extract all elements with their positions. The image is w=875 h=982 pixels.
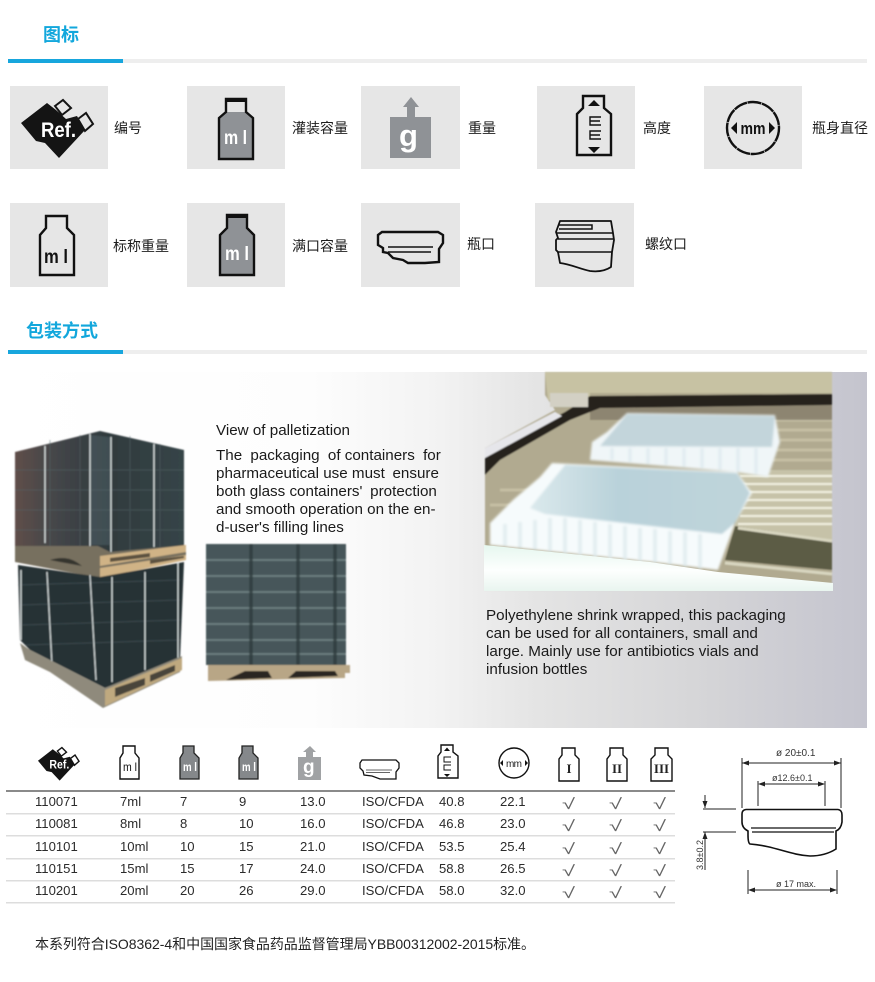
table row 110071: √ [653, 796, 667, 813]
table row 110101: 21.0 [300, 839, 325, 854]
table row 110071: 7 [180, 794, 187, 809]
table row 110081 [35, 816, 667, 835]
heading: 包装方式 [8, 320, 867, 354]
table row 110081: √ [562, 818, 576, 835]
table row 110201: 20ml [120, 883, 148, 898]
text: shrink wrap description: infusion bottles [486, 661, 588, 678]
table row 110081: 10 [239, 816, 254, 831]
table row 110151: √ [609, 863, 623, 880]
icon: diameter: mm [506, 759, 522, 770]
table row 110071: √ [609, 796, 623, 813]
table row 110101: 15 [239, 839, 254, 854]
table row 110071: 40.8 [439, 794, 464, 809]
table row 110201: 29.0 [300, 883, 325, 898]
label: 标称重量: 标称重量 [113, 238, 169, 254]
text: shrink wrap description: large. Mainly use for antibiotics vials and [486, 643, 759, 660]
photo: double stacked pallet [15, 431, 186, 708]
icon tile: 瓶身直径: mm [740, 119, 766, 138]
icon tile: 灌装容量: m l [224, 128, 247, 149]
text: palletization description [216, 447, 441, 536]
icon: weight: g [303, 757, 315, 778]
heading: 包装方式: 包装方式 [26, 320, 98, 341]
icon: filling: m l [183, 760, 197, 774]
table row 110081: 23.0 [500, 816, 525, 831]
table row 110101: 10 [180, 839, 195, 854]
table row 110151: 26.5 [500, 861, 525, 876]
table row 110071 [35, 794, 667, 813]
icon: brimful: m l [242, 760, 256, 774]
icon: finish [360, 760, 399, 779]
text: palletization description: and smooth operation on the en- [216, 501, 436, 518]
icon tile: 瓶口 [361, 203, 460, 287]
icon: filling [180, 746, 199, 779]
table row 110071: 7ml [120, 794, 141, 809]
table row 110081: 16.0 [300, 816, 325, 831]
table row 110201: √ [609, 885, 623, 902]
table row 110151: ISO/CFDA [362, 861, 424, 876]
diagram: bottle finish dimensions: ø 17 max. [776, 879, 816, 889]
table row 110201: 26 [239, 883, 254, 898]
label: 灌装容量: 灌装容量 [292, 120, 348, 136]
label: 重量: 重量 [468, 120, 496, 136]
label: 螺纹口: 螺纹口 [645, 236, 687, 252]
table row 110201: 20 [180, 883, 195, 898]
table row 110201 [35, 883, 667, 902]
icon tile: 重量: g [399, 118, 418, 153]
diagram: bottle finish dimensions: ø 20±0.1 [776, 748, 816, 759]
table row 110101 [35, 839, 667, 858]
diagram: bottle finish dimensions: ø12.6±0.1 [772, 773, 812, 783]
label: 瓶身直径: 瓶身直径 [812, 120, 868, 136]
table row 110201: 58.0 [439, 883, 464, 898]
table row 110101: 53.5 [439, 839, 464, 854]
table row 110101: ISO/CFDA [362, 839, 424, 854]
table row 110101: √ [609, 841, 623, 858]
icon: nominal [120, 746, 139, 779]
table row 110151: 15ml [120, 861, 148, 876]
table row 110081: 8 [180, 816, 187, 831]
diagram: bottle finish dimensions: 3.8±0.2 [695, 840, 705, 870]
text: palletization description: The packaging of containers for [216, 447, 441, 464]
diagram: bottle finish dimensions [695, 748, 842, 894]
table row 110081: √ [653, 818, 667, 835]
heading: 图标: 图标 [43, 25, 79, 45]
table row 110201: √ [653, 885, 667, 902]
label: 满口容量: 满口容量 [292, 238, 348, 254]
table row 110101: √ [562, 841, 576, 858]
photo: shrink wrapped packs on conveyor [484, 372, 833, 591]
table row 110151: 110151 [35, 861, 78, 876]
table row 110081: 46.8 [439, 816, 464, 831]
icon tile: 螺纹口 [535, 203, 634, 287]
icon tile: 编号: Ref. [41, 119, 76, 142]
table row 110101: √ [653, 841, 667, 858]
icon tile: 高度 [537, 86, 635, 169]
table row 110151: 24.0 [300, 861, 325, 876]
icon: reference [38, 748, 79, 781]
text: shrink wrap description: can be used for all containers, small and [486, 625, 758, 642]
table row 110081: ISO/CFDA [362, 816, 424, 831]
table row 110081: √ [609, 818, 623, 835]
icon: brimful [239, 746, 258, 779]
icon: type III: III [654, 761, 669, 776]
table row 110151: √ [562, 863, 576, 880]
icon tile: 满口容量: m l [225, 244, 249, 265]
table row 110101: 25.4 [500, 839, 525, 854]
table row 110081: 110081 [35, 816, 78, 831]
table row 110201: √ [562, 885, 576, 902]
table row 110201: 110201 [35, 883, 78, 898]
icon: type I: I [566, 761, 572, 776]
icon: diameter [499, 748, 529, 778]
table row 110151: 58.8 [439, 861, 464, 876]
table row 110151: √ [653, 863, 667, 880]
table row 110071: ISO/CFDA [362, 794, 424, 809]
icon tile: 编号 [10, 86, 108, 169]
text: palletization description: both glass containers' protection [216, 483, 437, 500]
table row 110071: 13.0 [300, 794, 325, 809]
label: 高度: 高度 [643, 120, 671, 136]
table row 110151 [35, 861, 667, 880]
panel: packaging background [0, 372, 867, 728]
table row 110081: 8ml [120, 816, 141, 831]
icon tile: 灌装容量 [187, 86, 285, 169]
table row 110151: 17 [239, 861, 254, 876]
footer note: 本系列符合ISO8362-4和中国国家食品药品监督管理局YBB00312002-2015标准。 [35, 936, 535, 952]
heading: 图标 [8, 25, 867, 63]
heading: View of palletization: View of palletization [216, 422, 350, 439]
icon tile: 标称重量 [10, 203, 108, 287]
text: shrink wrap description [486, 607, 786, 678]
icon tile: 标称重量: m l [44, 247, 68, 268]
table row 110151: 15 [180, 861, 195, 876]
table row 110071: 9 [239, 794, 246, 809]
icon: type II: II [612, 761, 622, 776]
icon: weight [298, 746, 321, 780]
table row 110071: 110071 [35, 794, 78, 809]
icon tile: 重量 [361, 86, 460, 169]
label: 瓶口: 瓶口 [467, 236, 495, 252]
text: palletization description: pharmaceutical use must ensure [216, 465, 439, 482]
table row 110201: ISO/CFDA [362, 883, 424, 898]
icon: reference: Ref. [49, 758, 69, 772]
table row 110101: 10ml [120, 839, 148, 854]
table: header icons [38, 745, 672, 781]
table row 110071: 22.1 [500, 794, 525, 809]
photo: single pallet [206, 544, 350, 681]
table row 110201: 32.0 [500, 883, 525, 898]
text: palletization description: d-user's filling lines [216, 519, 344, 536]
icon: type III [651, 748, 672, 781]
text: shrink wrap description: Polyethylene shrink wrapped, this packaging [486, 607, 786, 624]
icon: type II [607, 748, 627, 781]
icon: nominal: m l [123, 760, 137, 774]
icon: height [438, 745, 458, 778]
icon tile: 瓶身直径 [704, 86, 802, 169]
label: 编号: 编号 [114, 120, 142, 136]
icon: type I [559, 748, 579, 781]
icon tile: 满口容量 [187, 203, 285, 287]
table row 110071: √ [562, 796, 576, 813]
table row 110101: 110101 [35, 839, 78, 854]
